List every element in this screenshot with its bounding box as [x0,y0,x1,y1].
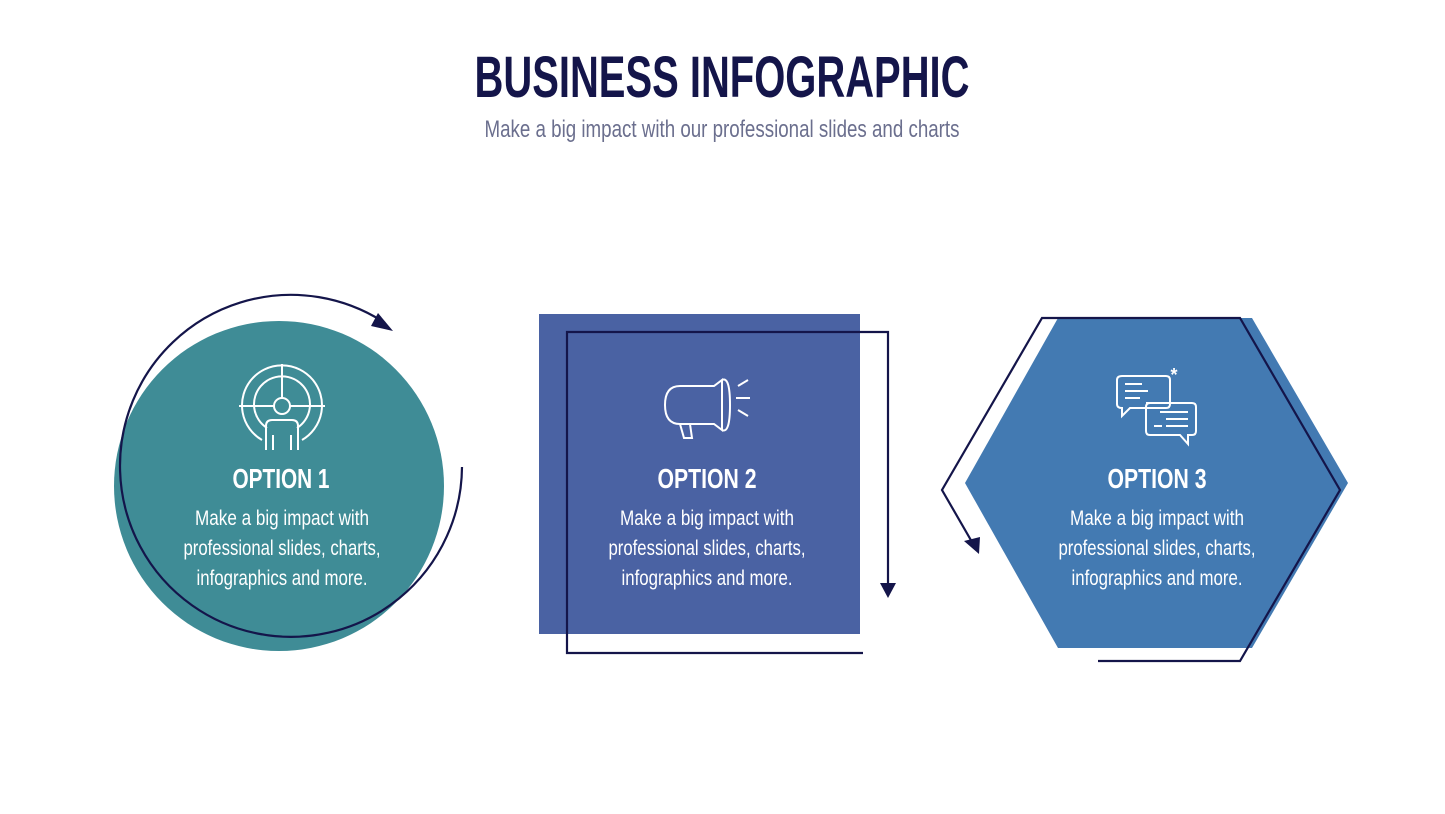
heading: OPTION 1 [232,463,330,494]
panel: option 2 [539,314,896,653]
arrow: square path [567,332,896,653]
body text: Make a big impact with [620,507,794,530]
subtitle: Make a big impact with our professional slides and charts [484,116,960,143]
heading: OPTION 3 [1108,463,1206,494]
hexagon fill [965,318,1348,648]
icon: chat bubbles: * [1170,365,1178,385]
body text: Make a big impact with [195,507,369,530]
body text [1058,507,1256,590]
body text: infographics and more. [1072,567,1242,590]
title: BUSINESS INFOGRAPHIC [474,45,970,110]
body text [184,507,380,590]
body text: professional slides, charts, [608,537,806,560]
body text [608,507,806,590]
body text: infographics and more. [196,567,368,590]
panel: option 1 [114,295,462,651]
icon: chat bubbles [1117,365,1196,444]
square fill [539,314,860,634]
body text: professional slides, charts, [184,537,380,560]
body text: Make a big impact with [1070,507,1244,530]
icon: megaphone [665,380,750,438]
circle fill [114,321,444,651]
heading: OPTION 2 [658,463,756,494]
body text: infographics and more. [622,567,792,590]
body text: professional slides, charts, [1058,537,1256,560]
arrow: circular [120,295,462,637]
arrow: hexagon path [942,318,1340,661]
icon: target person [239,364,325,450]
panel: option 3 [942,318,1348,661]
